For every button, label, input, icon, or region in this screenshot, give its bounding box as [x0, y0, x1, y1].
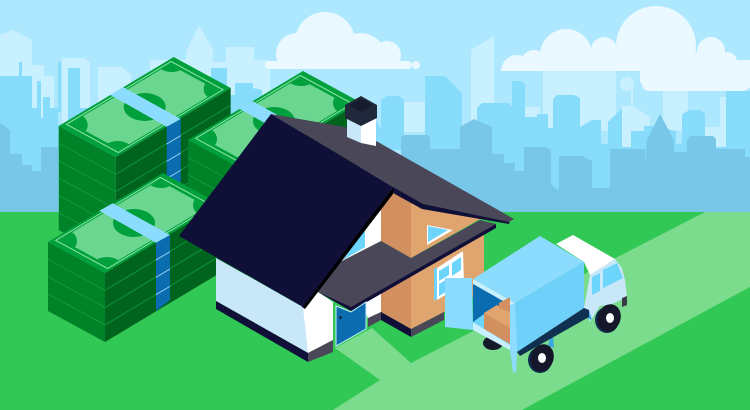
open right door [510, 303, 517, 373]
lower porch roof [318, 220, 496, 311]
money stack: back left [58, 52, 234, 261]
money stack: back right [187, 66, 363, 275]
chassis [517, 308, 589, 356]
lower wall base left [381, 312, 411, 337]
mid skyline [0, 62, 750, 212]
ground [0, 212, 750, 410]
moving truck [445, 235, 627, 375]
porch roof edge [318, 224, 496, 311]
front wheel [593, 301, 625, 335]
hidden rear wheel [483, 336, 503, 350]
upper orange wall left [381, 192, 411, 258]
cardboard boxes [484, 297, 510, 344]
front white wall [303, 292, 333, 353]
rear wheel arch [548, 337, 554, 348]
cab windscreen [603, 263, 623, 288]
roof edge [302, 187, 393, 309]
driveway path [333, 212, 750, 410]
front skyline [0, 114, 750, 212]
open left door [445, 278, 473, 330]
wall beside door [351, 293, 381, 319]
upper roof underside [393, 186, 510, 224]
front window [434, 251, 464, 301]
cargo opening frame [473, 279, 517, 352]
cab roof [556, 235, 615, 275]
cargo floor [473, 314, 510, 345]
front wall base [308, 340, 333, 362]
lower orange wall left [381, 268, 411, 329]
door [336, 302, 366, 346]
gable white wall [338, 205, 381, 265]
lower wall base right [411, 312, 444, 337]
triangle window [427, 225, 453, 245]
cargo interior [473, 284, 510, 344]
lower orange wall right [411, 228, 484, 329]
box side [515, 262, 584, 352]
base beside door [368, 312, 381, 327]
cloud right [501, 6, 750, 91]
upper orange wall right [411, 203, 482, 258]
upper grey roof [271, 114, 514, 222]
bumper [622, 296, 627, 307]
box top [473, 236, 584, 303]
left wall [216, 258, 308, 353]
gable window [343, 228, 365, 260]
money stack: front [47, 168, 223, 342]
cab front [584, 259, 627, 322]
front wheel arch [584, 310, 592, 320]
cab side window [592, 273, 600, 295]
left wall base [216, 301, 308, 362]
house [179, 96, 514, 362]
far skyline [0, 25, 730, 152]
cloud left [265, 12, 420, 69]
back wheel [526, 341, 558, 375]
chimney [345, 96, 377, 146]
main navy roof [179, 114, 393, 307]
